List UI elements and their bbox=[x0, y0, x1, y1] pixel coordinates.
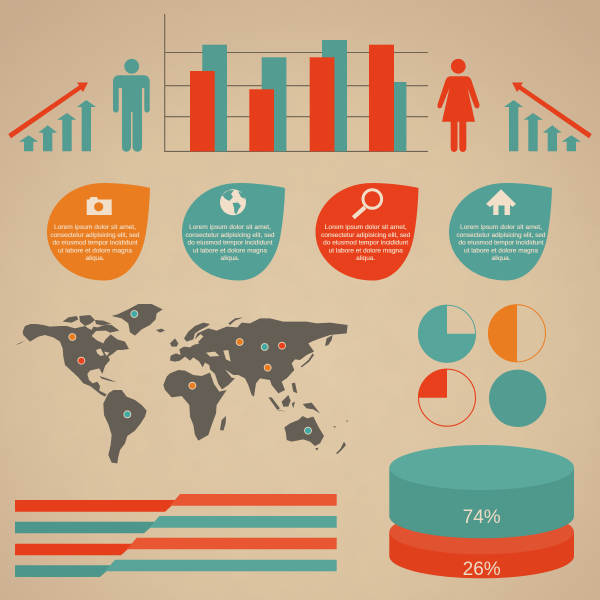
icon: globe bbox=[220, 189, 246, 215]
red segment bbox=[389, 509, 574, 578]
panel: orange drop bbox=[47, 183, 150, 280]
text block: Lorem ipsum dolor sit amet, bbox=[189, 224, 271, 231]
text block: aliqua. bbox=[86, 255, 105, 262]
icon: house bbox=[486, 189, 516, 215]
teal bars bbox=[202, 40, 406, 151]
text block: consectetur adipisicing elit, sed bbox=[50, 232, 140, 239]
text block: aliqua. bbox=[356, 255, 375, 262]
eurasia africa and oceania bbox=[163, 317, 348, 454]
world map bbox=[15, 304, 348, 463]
text block: do eiusmod tempor incididunt bbox=[188, 240, 273, 247]
pie charts bbox=[418, 304, 546, 427]
teal segment bbox=[389, 445, 574, 538]
pie: quarter red bbox=[418, 369, 476, 426]
americas and greenland bbox=[15, 304, 165, 463]
ribbon row 3 bbox=[15, 538, 337, 555]
ribbon row 1 bbox=[15, 494, 337, 512]
ribbon bars bbox=[15, 494, 337, 577]
text block: consectetur adipisicing elit, sed bbox=[186, 232, 275, 239]
chart axes and grid bbox=[165, 14, 428, 151]
text block: do eiusmod tempor incididunt bbox=[323, 240, 408, 247]
inland seas bbox=[193, 334, 231, 362]
text block: ut labore et dolore magna bbox=[193, 247, 267, 254]
pie: half orange bbox=[488, 304, 546, 362]
pie: three quarters teal bbox=[418, 305, 476, 363]
bar chart bbox=[165, 14, 428, 151]
small arrows rising bbox=[19, 100, 96, 151]
map markers bbox=[69, 310, 311, 434]
male figure bbox=[113, 59, 150, 152]
ribbon row 2 bbox=[15, 516, 337, 533]
icon: magnifier bbox=[353, 190, 382, 218]
americas lakes bbox=[96, 348, 109, 356]
text block: ut labore et dolore magna bbox=[464, 247, 538, 254]
text block: Lorem ipsum dolor sit amet, bbox=[54, 224, 136, 231]
text block: Lorem ipsum dolor sit amet, bbox=[460, 224, 542, 231]
text block: do eiusmod tempor incididunt bbox=[52, 240, 138, 247]
ribbon row 4 bbox=[15, 560, 337, 577]
female figure bbox=[437, 59, 479, 152]
growth arrows left bbox=[8, 82, 96, 151]
text block: consectetur adipisicing elit, sed bbox=[321, 232, 411, 239]
text block: Lorem ipsum dolor sit amet, bbox=[325, 224, 407, 231]
panel: teal drop bbox=[182, 183, 285, 280]
growth arrows right bbox=[504, 82, 592, 151]
value 74%: 74% bbox=[463, 507, 501, 528]
value 26%: 26% bbox=[463, 559, 501, 580]
text block: do eiusmod tempor incididunt bbox=[458, 240, 544, 247]
cylinder chart bbox=[389, 445, 574, 580]
text block: ut labore et dolore magna bbox=[58, 247, 132, 254]
red trend arrow bbox=[8, 82, 88, 138]
icon: camera bbox=[87, 197, 112, 215]
pie: full teal bbox=[489, 370, 546, 427]
panel: teal drop with house bbox=[449, 183, 552, 280]
red bars bbox=[190, 45, 394, 151]
text block: aliqua. bbox=[220, 255, 240, 262]
panel: red drop bbox=[316, 183, 418, 280]
text block: aliqua. bbox=[492, 255, 511, 262]
text block: ut labore et dolore magna bbox=[329, 247, 403, 254]
text block: consectetur adipisicing elit, sed bbox=[456, 232, 546, 239]
